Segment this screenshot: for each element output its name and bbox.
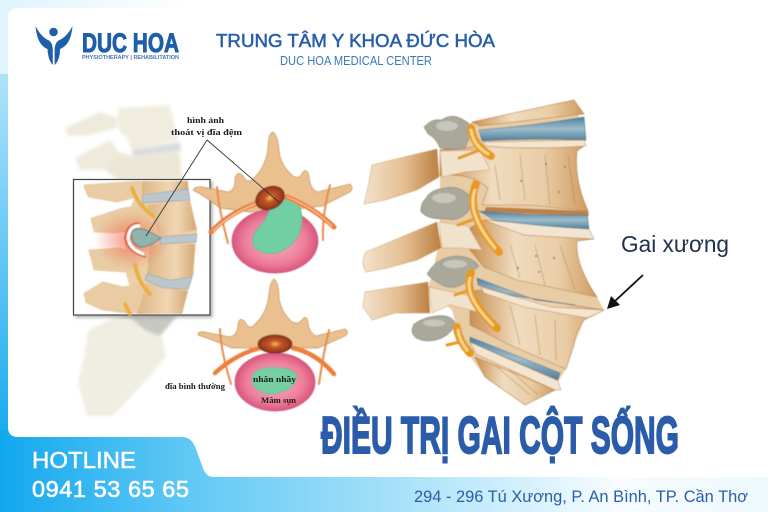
illustration: faded lumbar spine xyxy=(65,105,182,416)
label: nucleus: nhân nhầy xyxy=(253,374,297,384)
herniated nucleus xyxy=(253,198,302,254)
label: normal disc: đĩa bình thường xyxy=(165,382,225,391)
logo tagline: PHYSIOTHERAPY | REHABILITATION xyxy=(82,55,179,61)
hotline xyxy=(32,447,189,502)
nerve roots xyxy=(125,188,153,314)
illustration: herniated disc cross-section xyxy=(193,132,352,273)
intervertebral discs xyxy=(142,189,197,289)
arrow: to bone spur xyxy=(607,275,643,309)
illustration: normal disc cross-section xyxy=(198,279,348,411)
intervertebral discs xyxy=(470,117,589,380)
nerve roots xyxy=(447,128,499,353)
icon: logo figure xyxy=(36,26,72,65)
spinal nerves xyxy=(211,185,334,243)
vertebral bodies xyxy=(137,181,197,314)
spinal canal xyxy=(252,182,288,214)
label: cartilage plate: Mâm sụn xyxy=(261,395,296,405)
hotline number: 0941 53 65 65 xyxy=(32,476,189,502)
disc nucleus xyxy=(252,367,297,394)
label: bone spur: Gai xương xyxy=(621,231,729,257)
inset: herniated disc spine xyxy=(74,180,210,315)
vertebral column base xyxy=(428,100,604,405)
vertebral arch xyxy=(193,132,352,212)
disc lips and bone spur xyxy=(470,140,604,390)
vertebral bodies xyxy=(440,100,604,405)
facet joints xyxy=(412,116,479,341)
address: 294 - 296 Tú Xương, P. An Bình, TP. Cần Thơ xyxy=(414,487,748,506)
vertebrae and processes xyxy=(85,182,150,312)
subheading: center name in English: DUC HOA MEDICAL CENTER xyxy=(280,54,432,68)
vertebral arch xyxy=(198,279,348,348)
cream pedicles xyxy=(429,150,490,313)
label: disc herniation image: hình ảnh xyxy=(187,115,224,125)
inset frame xyxy=(74,180,210,315)
disc annulus xyxy=(232,209,318,273)
vertebral column base xyxy=(125,181,197,314)
heading: center name: TRUNG TÂM Y KHOA ĐỨC HÒA xyxy=(216,30,496,51)
illustration: spine with bone spur xyxy=(363,100,604,405)
transverse processes xyxy=(363,149,441,320)
logo xyxy=(36,26,179,65)
spinal nerves xyxy=(215,329,334,384)
hotline label: HOTLINE xyxy=(32,447,136,473)
logo wordmark: DUC HOA xyxy=(82,28,179,58)
leader lines xyxy=(146,140,280,236)
label: herniated disc: thoát vị đĩa đệm xyxy=(171,127,242,137)
herniated disc xyxy=(128,226,144,254)
spinal canal xyxy=(258,335,292,353)
bone surface streaks xyxy=(495,155,575,395)
disc annulus xyxy=(235,353,315,411)
inflammation glow xyxy=(94,210,170,270)
